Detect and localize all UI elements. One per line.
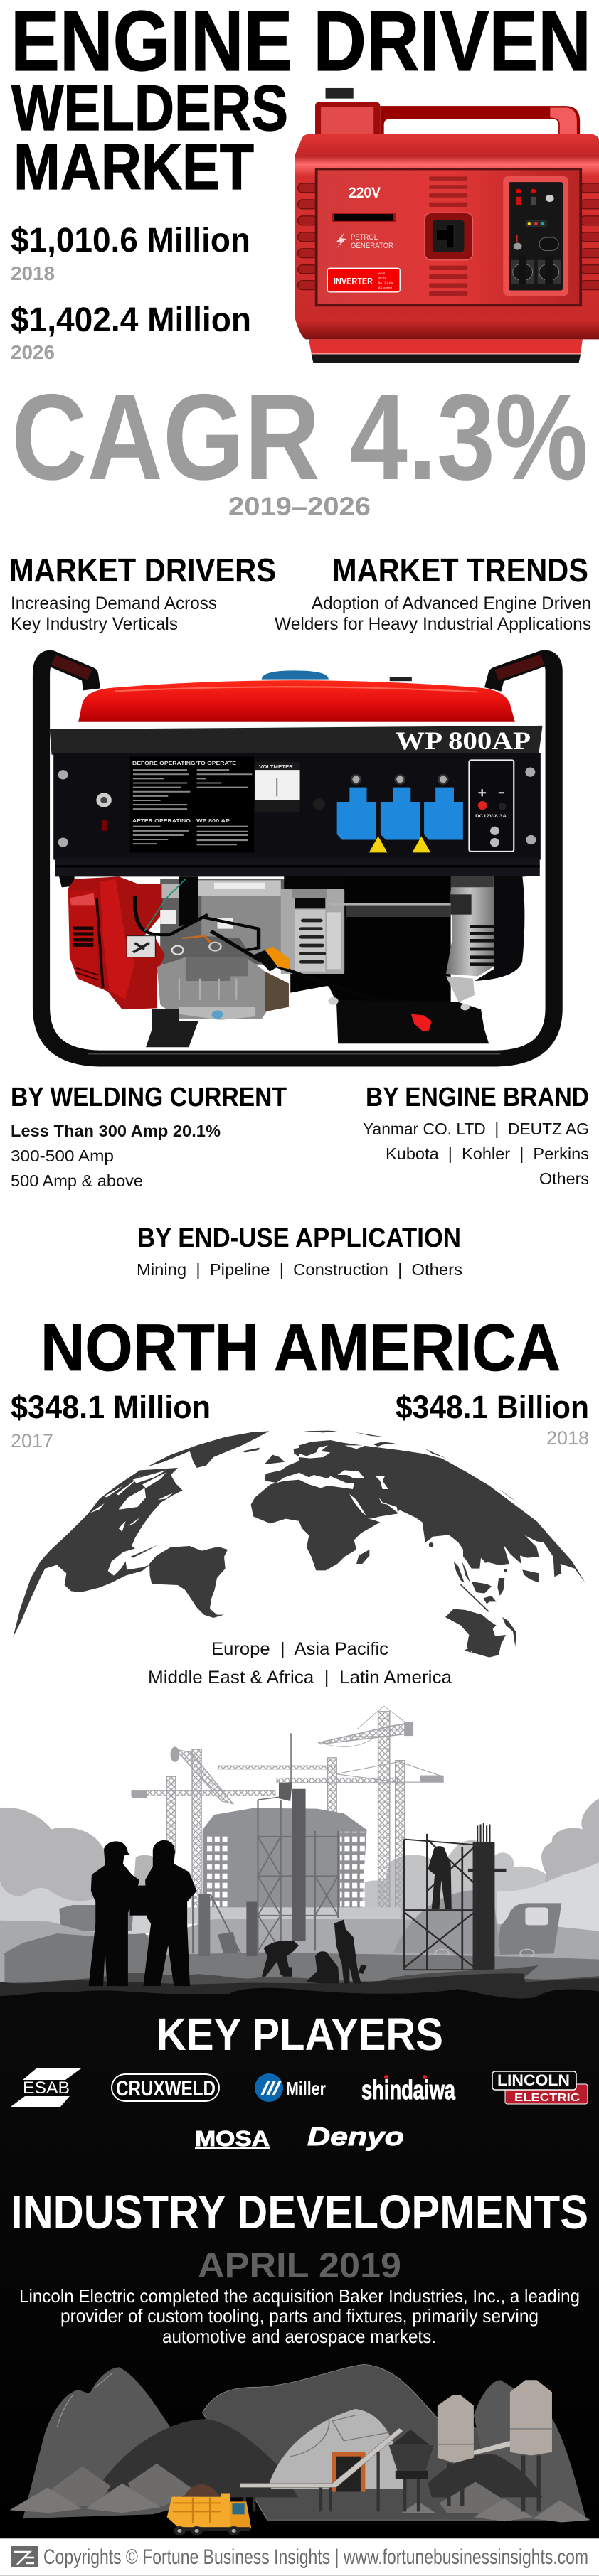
- gravel piles: [9, 2464, 590, 2522]
- market trends: Welders for Heavy Industrial Applications: [275, 614, 591, 634]
- generator panel labels: DC12V/8.3A: [475, 814, 507, 819]
- control panel: [50, 726, 543, 876]
- generator labels: INVERTER: [334, 276, 373, 286]
- other regions: Europe | Asia Pacific: [211, 1639, 388, 1659]
- by engine brand: Kubota | Kohler | Perkins: [386, 1144, 589, 1163]
- dump truck: [167, 2484, 251, 2535]
- generator panel labels: WP 800 AP: [196, 817, 230, 824]
- by welding current: Less Than 300 Amp 20.1%: [11, 1122, 221, 1140]
- other regions: [148, 1639, 452, 1687]
- DC breaker panel: [469, 760, 514, 852]
- market value 2018: $1,010.6 Million: [11, 222, 250, 259]
- logo: ESAB: [11, 2068, 81, 2107]
- generator labels: PETROL: [351, 233, 378, 242]
- north america 2017 value: [11, 1389, 211, 1451]
- logo: Denyo: Denyo: [307, 2122, 404, 2151]
- by end-use application: [137, 1223, 462, 1279]
- north america 2018 value: 2018: [546, 1427, 589, 1449]
- development description: provider of custom tooling, parts and fixtures, primarily serving: [60, 2305, 539, 2327]
- by end-use application: Mining | Pipeline | Construction | Others: [137, 1260, 462, 1279]
- fuel tank: [78, 670, 515, 722]
- market value 2026: 2026: [11, 341, 55, 363]
- world map globe: [13, 1431, 585, 1658]
- by welding current: [11, 1083, 287, 1190]
- mid ground hills: [0, 1862, 599, 1995]
- logo: Lincoln Electric: LINCOLN: [497, 2071, 570, 2089]
- dark lower section background: [0, 2010, 599, 2538]
- icon: red inverter generator: [295, 88, 599, 363]
- development description: [19, 2285, 580, 2347]
- back clouds: [0, 1798, 599, 1933]
- generator labels: AS current: [378, 286, 393, 289]
- by welding current: BY WELDING CURRENT: [11, 1083, 287, 1112]
- market trends: [275, 552, 591, 634]
- market drivers: MARKET DRIVERS: [9, 552, 276, 589]
- key players heading: KEY PLAYERS: [157, 2009, 443, 2060]
- north america 2018 value: [396, 1389, 589, 1449]
- mountains: [23, 2364, 586, 2520]
- cranes: [132, 1706, 443, 1923]
- title: MARKET: [14, 132, 254, 203]
- frame handle grips and highlight: [53, 660, 543, 1053]
- sockets: [337, 775, 463, 852]
- frame tubes: [41, 658, 554, 1058]
- base and feet: [146, 976, 489, 1047]
- logo: shindaiwa: shindaiwa: [361, 2076, 456, 2105]
- generator labels: GENERATOR: [351, 242, 393, 250]
- by engine brand: Yanmar CO. LTD | DEUTZ AG: [363, 1120, 589, 1138]
- silos: [438, 2380, 552, 2511]
- market value 2018: 2018: [11, 262, 55, 284]
- date: april 2019: APRIL 2019: [198, 2245, 401, 2285]
- engine and alternator: [55, 867, 526, 1019]
- logos: key players: [11, 2068, 588, 2151]
- right scaffold tower: [404, 1823, 507, 1970]
- market drivers: Key Industry Verticals: [11, 614, 178, 634]
- generator panel labels: [132, 726, 531, 824]
- title: [11, 0, 591, 203]
- two engineers silhouette: [89, 1840, 197, 1986]
- title: WELDERS: [11, 73, 288, 144]
- crouching workers: [262, 1919, 367, 1983]
- development description: automotive and aerospace markets.: [162, 2326, 436, 2347]
- generator labels: 220V: [378, 271, 386, 274]
- market trends: Adoption of Advanced Engine Driven: [312, 594, 591, 613]
- north america 2017 value: $348.1 Million: [11, 1389, 211, 1425]
- footer: [0, 2538, 599, 2576]
- market drivers: [9, 552, 276, 634]
- north america 2018 value: $348.1 Billion: [396, 1389, 589, 1425]
- logo: Lincoln Electric: ELECTRIC: [514, 2092, 581, 2104]
- by welding current: 500 Amp & above: [11, 1171, 143, 1190]
- icon: WP 800AP generator photo: [41, 658, 554, 1058]
- americas and western europe: [13, 1431, 300, 1637]
- generator panel labels: WP 800AP: [396, 726, 531, 755]
- by end-use application: BY END-USE APPLICATION: [137, 1223, 461, 1253]
- market value 2018: [11, 222, 250, 284]
- market value 2026: [11, 301, 251, 363]
- CAGR: 2019–2026: [228, 492, 371, 521]
- generator panel labels: BEFORE OPERATING/TO OPERATE: [132, 760, 236, 766]
- africa, asia and australia: [299, 1431, 585, 1658]
- tunnel entrance and conveyors: [240, 2428, 510, 2511]
- mining scene illustration: [9, 2364, 590, 2535]
- icon: fortune business insights logo: [11, 2546, 38, 2567]
- logo: Miller: [255, 2073, 326, 2102]
- by engine brand: Others: [539, 1169, 589, 1188]
- by engine brand: [363, 1083, 589, 1188]
- north america heading: NORTH AMERICA: [41, 1310, 561, 1385]
- generator panel labels: VOLTMETER: [259, 765, 293, 770]
- building under construction: [203, 1808, 367, 1918]
- central scaffold and column: [193, 1782, 338, 1956]
- market drivers: Increasing Demand Across: [11, 594, 217, 613]
- generator labels: 220V: [349, 185, 381, 201]
- generator labels: [334, 185, 393, 289]
- logo: Lincoln Electric: [492, 2071, 588, 2104]
- generator panel labels: AFTER OPERATING: [132, 817, 191, 824]
- logo: Miller: Miller: [286, 2078, 326, 2099]
- logo: ESAB: ESAB: [23, 2078, 70, 2098]
- construction site scene: [0, 1706, 599, 2012]
- logo: MOSA: MOSA: [195, 2126, 270, 2151]
- foreground ground: [0, 1965, 599, 2012]
- generator labels: 50 Hz: [378, 276, 386, 279]
- other regions: Middle East & Africa | Latin America: [148, 1668, 452, 1687]
- logo: CRUXWELD: CRUXWELD: [116, 2077, 216, 2100]
- by welding current: 300-500 Amp: [11, 1147, 114, 1165]
- market value 2026: $1,402.4 Million: [11, 301, 251, 339]
- north america 2017 value: 2017: [11, 1430, 53, 1451]
- generator labels: 5A - 3.2 kW: [378, 281, 393, 284]
